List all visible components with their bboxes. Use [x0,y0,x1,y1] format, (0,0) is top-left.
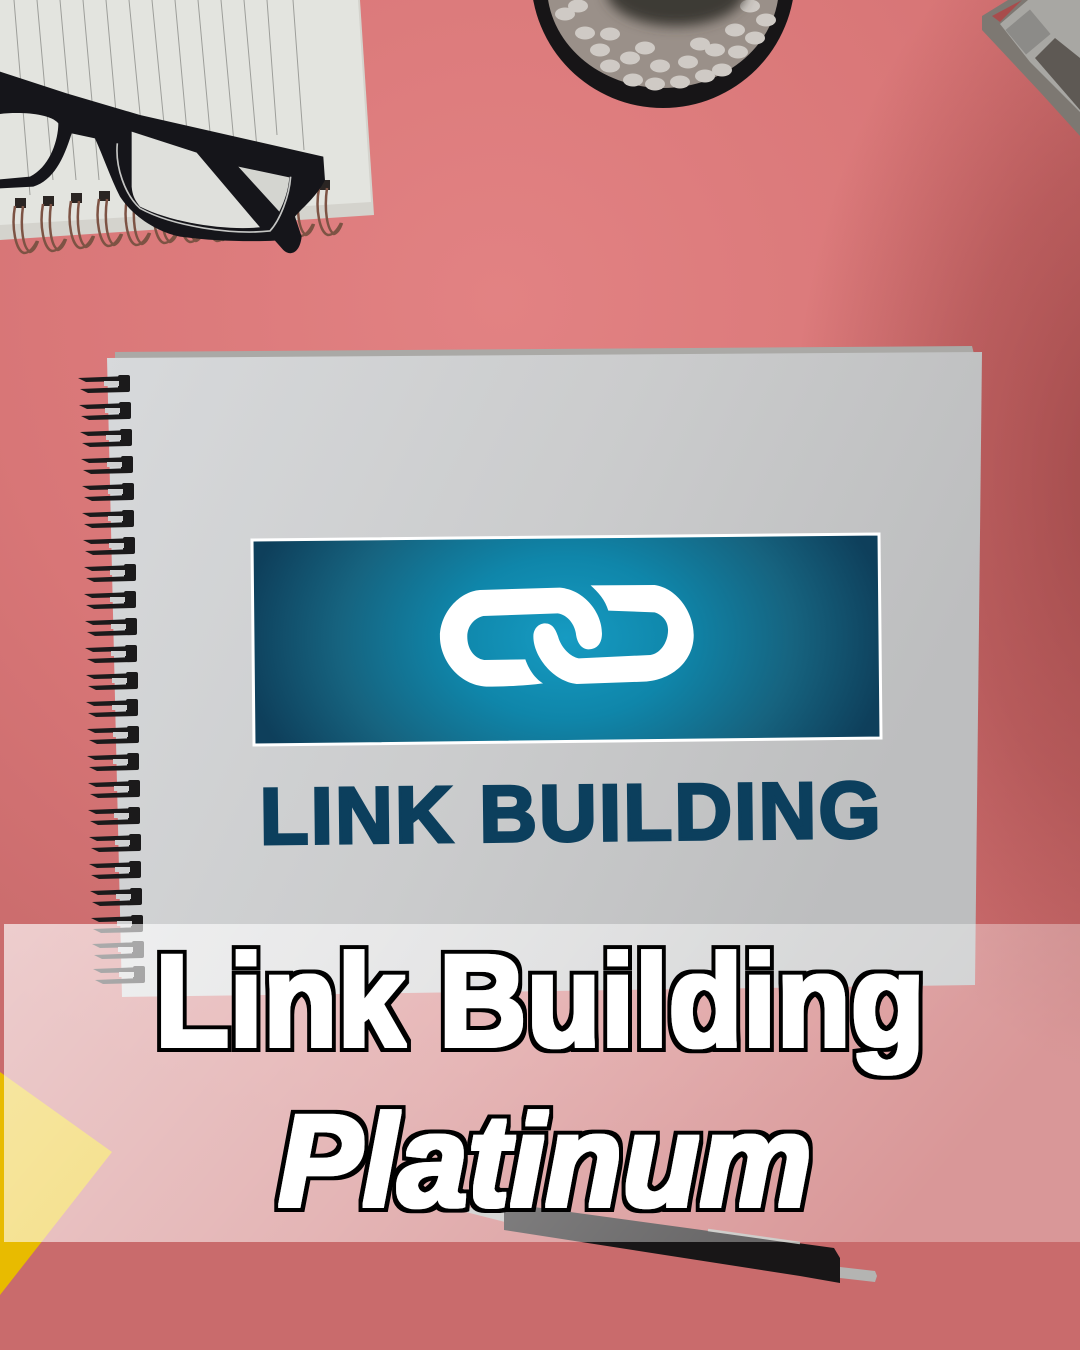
photo: black glasses [0,72,325,253]
photo: pen [458,1202,877,1283]
title line 1: Link Building [155,927,925,1074]
translucent title band [4,924,1080,1242]
notebook [78,346,982,997]
spiral binding [78,375,145,984]
photo: spiral notepad [0,0,374,253]
photo: yellow sticky note [0,1072,112,1295]
photo: silver gadget corner [982,0,1080,136]
title line 2: Platinum [278,1087,812,1234]
icon: chain link [440,585,694,687]
blue panel with white border [252,534,881,745]
photo: cactus pot [531,0,795,108]
notebook heading: LINK BUILDING [259,765,881,861]
